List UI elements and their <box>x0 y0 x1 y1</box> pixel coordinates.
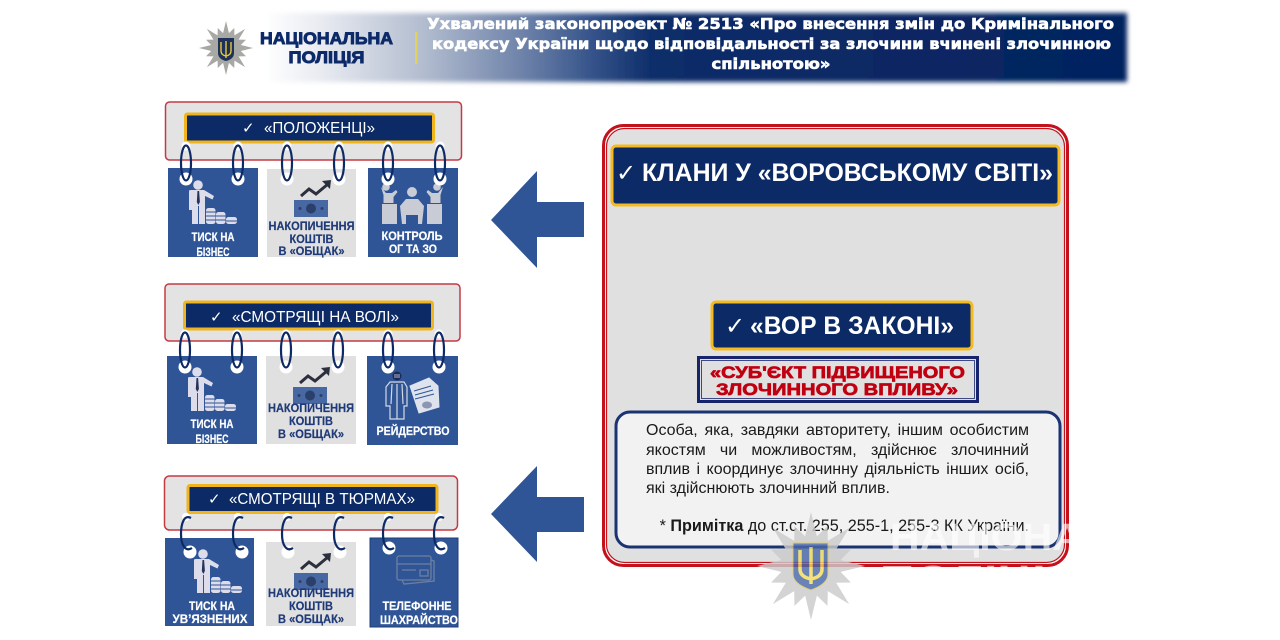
watermark wordmark: ПОЛІЦІЯ <box>880 559 1080 601</box>
card: телефонне шахрайство <box>370 538 458 627</box>
group 3 title bar <box>188 486 437 512</box>
card: накопичення коштів: НАКОПИЧЕННЯ <box>268 403 354 415</box>
group 1 title bar <box>186 114 434 142</box>
definition text: * Примітка до ст.ст. 255, 255-1, 255-3 КК України. <box>660 517 1029 535</box>
header logo wordmark: ПОЛІЦІЯ <box>288 48 364 67</box>
group 1: «ПОЛОЖЕНЦІ» <box>166 102 462 259</box>
group 2 title bar <box>184 302 432 329</box>
heading: вор в законі <box>712 302 972 349</box>
definition text: якостям чи можливостям, здійснює злочинний <box>646 442 1029 459</box>
header title: кодексу України щодо відповідальності за злочини вчинені злочинною <box>432 35 1111 53</box>
group 2 title bar: «СМОТРЯЩІ НА ВОЛІ» <box>232 309 399 326</box>
heading: вор в законі: ✓ <box>725 312 745 340</box>
heading: вор в законі: «ВОР В ЗАКОНІ» <box>750 312 954 340</box>
arrow: bottom, pointing left <box>491 466 584 562</box>
card: тиск на ув'язнених <box>165 538 254 626</box>
definition text <box>646 422 1029 535</box>
definition box background <box>616 412 1060 547</box>
card: накопичення коштів: НАКОПИЧЕННЯ <box>268 221 354 233</box>
group 1 title bar: ✓ <box>242 119 255 137</box>
card: накопичення коштів: НАКОПИЧЕННЯ <box>268 588 354 600</box>
group 1 panel <box>166 102 462 160</box>
header band <box>265 13 1127 82</box>
main heading: клани: ✓ <box>616 159 636 187</box>
card: накопичення коштів: КОШТІВ <box>289 601 333 613</box>
main heading: клани <box>612 146 1059 205</box>
card: тиск на бізнес: ТИСК НА <box>192 232 234 244</box>
arrow: top, pointing left <box>491 171 584 268</box>
watermark: police star emblem <box>757 512 865 620</box>
card: накопичення коштів <box>266 542 356 626</box>
card: контроль ОГ та ЗО: ОГ ТА ЗО <box>389 244 437 256</box>
header logo wordmark: НАЦІОНАЛЬНА <box>260 29 393 48</box>
card: тиск на бізнес: БІЗНЕС <box>196 247 230 259</box>
header logo wordmark <box>260 29 393 67</box>
callout: суб'єкт підвищеного злочинного впливу: ЗЛОЧИННОГО ВПЛИВУ» <box>716 380 958 399</box>
card: контроль ОГ та ЗО: КОНТРОЛЬ <box>382 231 442 243</box>
card: тиск на бізнес: ТИСК НА <box>190 419 234 431</box>
card: телефонне шахрайство: ТЕЛЕФОННЕ <box>382 601 452 613</box>
definition text: Особа, яка, завдяки авторитету, іншим особистим <box>646 422 1029 439</box>
header divider <box>415 32 418 64</box>
group 2 panel <box>165 284 460 341</box>
header logo: police star <box>199 21 253 75</box>
group 3 title bar: ✓ <box>208 490 221 508</box>
main heading: клани: КЛАНИ У «ВОРОВСЬКОМУ СВІТІ» <box>642 159 1053 187</box>
watermark wordmark: НАЦІОНАЛЬНА <box>890 517 1200 559</box>
group 2 title bar: ✓ <box>210 308 223 326</box>
card: накопичення коштів <box>266 356 356 444</box>
card: тиск на бізнес <box>167 356 257 446</box>
group 1 binder rings <box>180 142 446 186</box>
main panel <box>604 126 1068 566</box>
card: накопичення коштів: В «ОБЩАК» <box>278 614 344 626</box>
card: телефонне шахрайство: ШАХРАЙСТВО <box>380 614 458 627</box>
card: тиск на ув'язнених: ТИСК НА <box>189 601 235 613</box>
group 3: «СМОТРЯЩІ В ТЮРМАХ» <box>164 476 458 627</box>
group 1 title bar: «ПОЛОЖЕНЦІ» <box>264 120 375 137</box>
card: тиск на ув'язнених: УВ’ЯЗНЕНИХ <box>172 614 248 626</box>
header title: спільнотою» <box>712 55 830 73</box>
group 3 binder rings <box>181 513 448 558</box>
group 3 title bar: «СМОТРЯЩІ В ТЮРМАХ» <box>229 491 415 508</box>
header title: Ухвалений законопроект № 2513 «Про внесення змін до Кримінального <box>427 15 1114 33</box>
header title <box>427 15 1114 73</box>
card: накопичення коштів: КОШТІВ <box>289 416 333 428</box>
group 3 panel <box>164 476 458 530</box>
card: рейдерство: РЕЙДЕРСТВО <box>376 425 450 438</box>
definition text: вплив і координує злочинну діяльність інших осіб, <box>646 461 1029 478</box>
card: контроль ОГ та ЗО <box>368 168 458 257</box>
card: накопичення коштів: В «ОБЩАК» <box>278 246 344 258</box>
definition text: які здійснюють злочинний вплив. <box>646 480 890 497</box>
callout: суб'єкт підвищеного злочинного впливу: «СУБ'ЄКТ ПІДВИЩЕНОГО <box>710 363 965 382</box>
card: тиск на бізнес: БІЗНЕС <box>196 434 228 446</box>
callout: суб'єкт підвищеного злочинного впливу <box>698 358 978 402</box>
card: накопичення коштів: КОШТІВ <box>290 234 334 246</box>
group 2 binder rings <box>178 330 446 374</box>
group 2: «СМОТРЯЩІ НА ВОЛІ» <box>165 284 460 446</box>
card: накопичення коштів <box>267 169 356 258</box>
card: рейдерство <box>367 356 458 445</box>
watermark wordmark <box>880 517 1200 601</box>
card: накопичення коштів: В «ОБЩАК» <box>278 429 344 441</box>
card: тиск на бізнес <box>168 168 258 259</box>
